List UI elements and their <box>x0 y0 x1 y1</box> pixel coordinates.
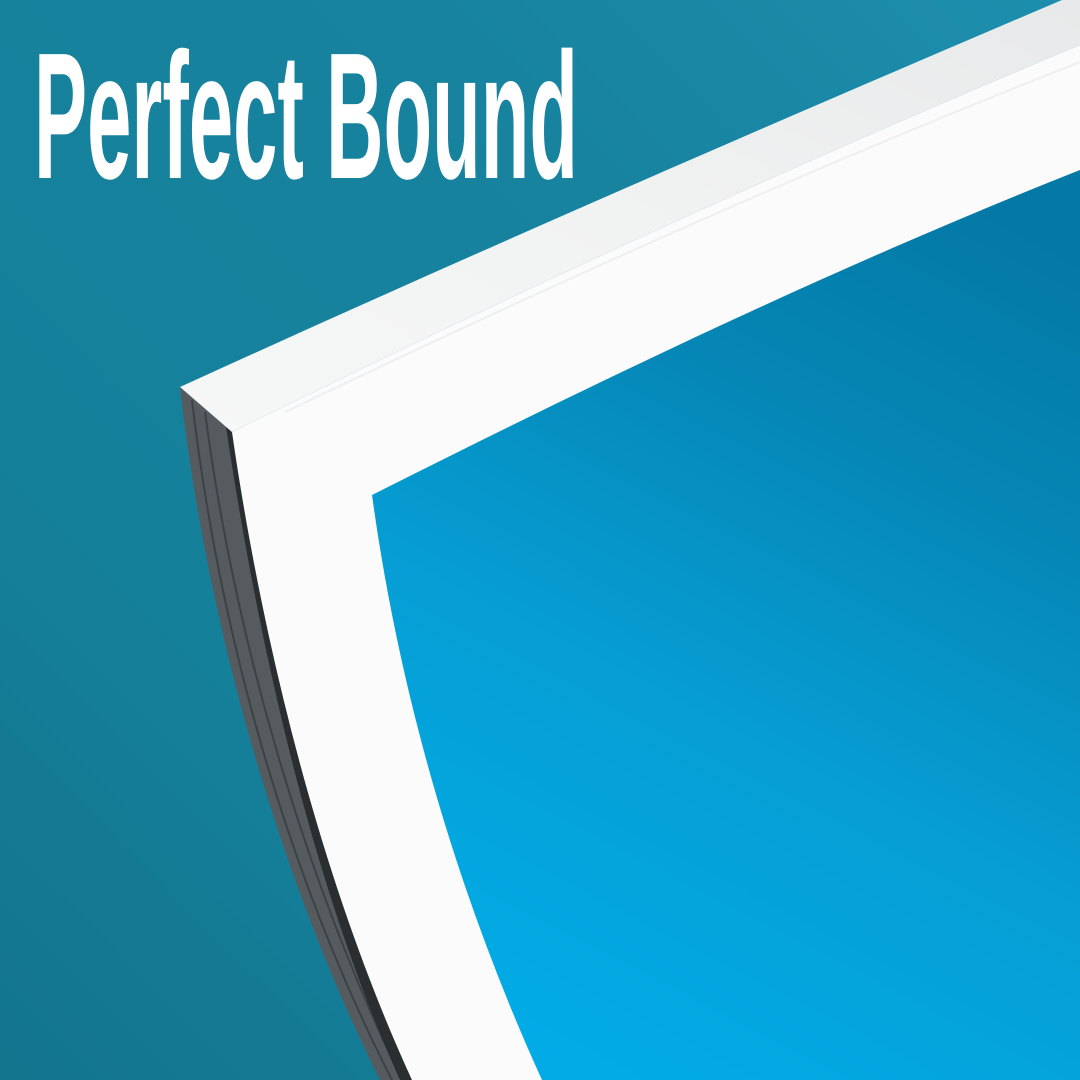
spine: top edge of book <box>180 0 1080 432</box>
hinge crease <box>285 62 1080 412</box>
cover: white front with hinge <box>232 45 1080 1080</box>
page block edge <box>180 387 412 1080</box>
inner blue page <box>372 170 1080 1080</box>
